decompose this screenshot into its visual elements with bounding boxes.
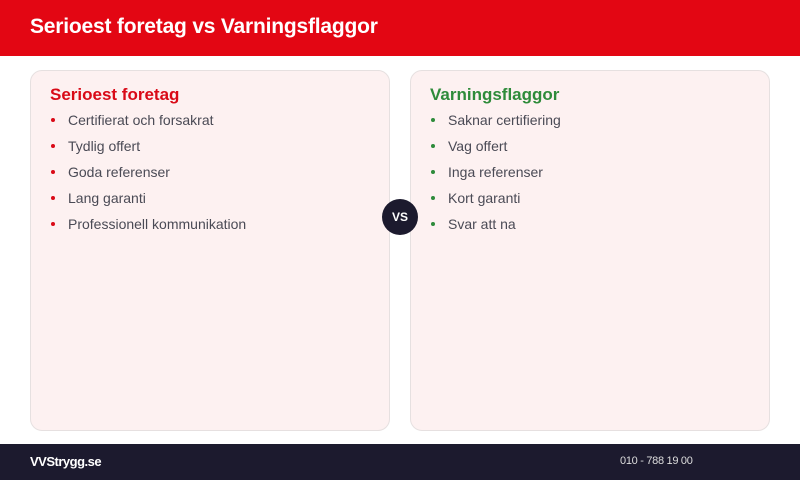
list: varningsflaggor items: Vag offert bbox=[448, 138, 507, 154]
list: varningsflaggor items bbox=[431, 112, 561, 232]
list: varningsflaggor items: Svar att na bbox=[448, 216, 516, 232]
panel: serioest foretag bbox=[30, 70, 390, 431]
heading: varningsflaggor: Varningsflaggor bbox=[430, 85, 559, 104]
list: serioest items: Tydlig offert bbox=[68, 138, 140, 154]
list: varningsflaggor items: Kort garanti bbox=[448, 190, 520, 206]
list: serioest items: Lang garanti bbox=[68, 190, 146, 206]
heading: serioest foretag: Serioest foretag bbox=[50, 85, 179, 104]
list: serioest items: Certifierat och forsakrat bbox=[68, 112, 214, 128]
list: varningsflaggor items: Inga referenser bbox=[448, 164, 543, 180]
list: varningsflaggor items: Saknar certifiering bbox=[448, 112, 561, 128]
title: Serioest foretag vs Varningsflaggor bbox=[30, 15, 378, 38]
vs badge: VS bbox=[392, 210, 408, 224]
panel: varningsflaggor bbox=[410, 70, 770, 431]
footer phone: 010 - 788 19 00 bbox=[620, 455, 693, 467]
footer bbox=[0, 444, 800, 480]
list: serioest items: Professionell kommunikation bbox=[68, 216, 246, 232]
vs badge bbox=[382, 199, 418, 235]
list: serioest items bbox=[51, 112, 246, 232]
header bbox=[0, 0, 800, 56]
list: serioest items: Goda referenser bbox=[68, 164, 170, 180]
footer brand: VVStrygg.se bbox=[30, 454, 101, 469]
